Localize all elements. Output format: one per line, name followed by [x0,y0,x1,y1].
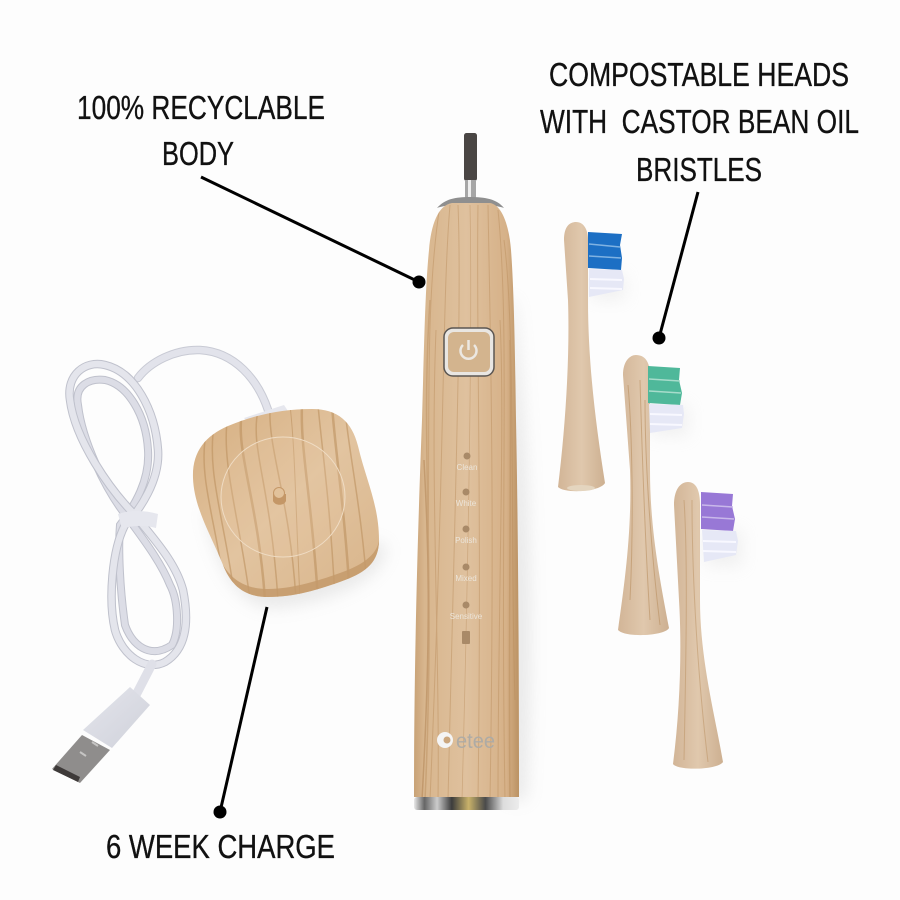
mode indicators: Sensitive [450,612,483,621]
callout: recyclable body [77,89,426,288]
brush shaft [464,133,477,198]
mode indicators [450,452,483,644]
mode indicators: Mixed [455,574,477,583]
replacement head: purple [673,482,742,769]
callout: charge life: 6 WEEK CHARGE [106,828,335,865]
callout: recyclable body: 100% RECYCLABLE [77,89,325,126]
wood grain [422,205,515,800]
mode indicators: Polish [455,536,477,545]
charging base [193,405,386,608]
etee logo: etee [456,730,495,753]
chrome collar [437,197,504,208]
callout: charge life [106,607,335,865]
toothbrush handle [414,133,530,810]
power button [444,328,494,376]
infographic [52,62,858,858]
callout: compostable heads: BRISTLES [636,151,762,188]
mode indicators: White [456,499,477,508]
callout: compostable heads [540,56,859,344]
replacement head: green [618,355,688,635]
charging cable with USB plug [52,350,290,783]
mode indicators: Clean [457,463,477,472]
chrome base ring [414,797,519,810]
replacement head: blue [558,222,625,491]
etee logo [437,730,495,753]
callout: recyclable body: BODY [162,135,234,172]
